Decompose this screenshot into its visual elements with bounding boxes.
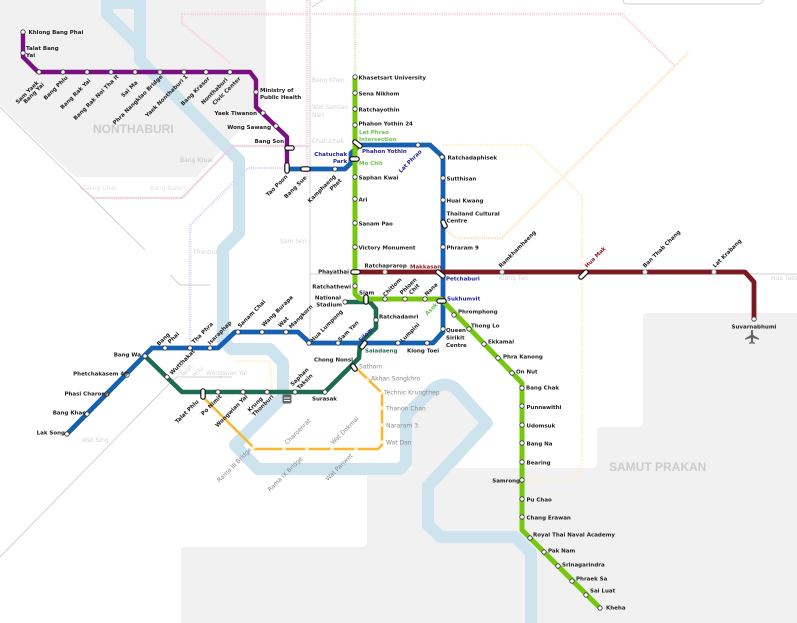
purple labels: Bang Rak Noi Tha It <box>73 74 121 122</box>
yellow line labels: Wat Pariwet <box>324 452 355 483</box>
region label: Samut Prakan: SAMUT PRAKAN <box>609 460 706 474</box>
blue labels: Ratchadaphisek <box>448 156 497 162</box>
blue labels: Sam Yan <box>337 320 360 343</box>
blue labels: Sukhumvit <box>447 296 481 302</box>
dark green labels: Taksin <box>296 373 314 391</box>
faint planned station labels: Taling Chan <box>82 185 118 192</box>
blue labels: Mangkorn <box>288 304 314 330</box>
yellow line labels: Technic Krungthep <box>383 390 440 396</box>
maroon labels: Ramkhamhaeng <box>498 230 538 269</box>
top right box edge <box>623 0 763 4</box>
light green labels: Asok <box>425 302 440 317</box>
light green labels: Thong Lo <box>471 324 500 330</box>
purple labels: Bang Sue <box>283 175 309 200</box>
dark green labels: Saladaeng <box>365 348 398 354</box>
river <box>107 0 531 623</box>
faint planned station labels: Bang Khen <box>312 77 345 84</box>
blue labels: Tha Phra <box>191 321 215 345</box>
blue labels: Centre <box>446 218 468 224</box>
dark green labels: Thonburi <box>252 394 275 418</box>
light green labels: Udomsuk <box>526 424 556 430</box>
dark green labels: Chong Nonsi <box>314 358 353 364</box>
light green labels: Ari <box>358 198 367 204</box>
faint planned station labels: Sam Sen <box>280 238 307 245</box>
dark green labels: Wutthakat <box>169 349 197 376</box>
light green labels: Ekkamai <box>488 340 514 346</box>
blue stations <box>65 143 445 436</box>
dark green labels: Talat Phlu <box>174 399 200 425</box>
light green labels: On Nut <box>516 370 538 376</box>
light green labels: Victory Monument <box>358 246 416 252</box>
dark green stations <box>165 300 378 394</box>
blue labels: Wat <box>278 316 291 329</box>
blue labels: Thailand Cultural <box>446 212 500 218</box>
dark green labels: Surasak <box>312 396 337 402</box>
faint planned station labels: Wat Samian <box>312 104 348 111</box>
faint planned station labels: Thonburi <box>192 249 220 256</box>
light green labels: Pu Chao <box>526 498 552 504</box>
light green labels: Chitlom <box>382 277 404 298</box>
blue labels: Silom <box>358 327 375 344</box>
light green labels: Phraek Sa <box>576 576 608 582</box>
maroon route <box>356 272 754 318</box>
light green labels: Samrong <box>492 478 520 484</box>
purple labels: Yaek Nonthaburi 1 <box>144 74 190 120</box>
faint planned station labels: Chatuchak <box>312 138 345 145</box>
dark green labels: Krung <box>247 396 264 414</box>
light green labels: Sai Luat <box>590 588 616 594</box>
faint planned station labels: Wat Sing <box>82 437 109 444</box>
faint planned station labels: Klong Tan <box>499 275 528 282</box>
faint planned station labels: Bang Bamru <box>150 185 187 192</box>
blue labels: Huai Kwang <box>446 198 484 204</box>
purple labels: Yai <box>25 53 35 59</box>
interchange capsules <box>203 142 586 397</box>
blue labels: Phahon Yothin <box>362 149 407 155</box>
light green labels: Khasetsart University <box>358 76 426 82</box>
light green labels: Ratchathewi <box>312 284 351 290</box>
yellow line stations <box>252 378 384 451</box>
purple labels: Bang Rak Yai <box>60 78 92 111</box>
maroon stations <box>383 270 756 321</box>
light green labels: Phayathai <box>318 270 349 276</box>
light green labels: Phra Kanong <box>503 354 543 360</box>
light green labels: Royal Thai Naval Academy <box>533 532 615 538</box>
yellow line <box>203 364 440 493</box>
yellow line labels: Charoenrat <box>284 417 313 446</box>
light green labels: Punnawithi <box>526 405 562 411</box>
light green labels: Pak Nam <box>548 548 575 554</box>
blue labels: Phraram 9 <box>446 246 479 252</box>
light green labels: Sanam Pao <box>358 222 393 228</box>
purple labels: Khlong Bang Phai <box>28 30 83 36</box>
blue labels <box>37 149 500 436</box>
blue labels: Phetchakasem 48 <box>73 372 128 378</box>
yellow line labels: Rama III Bridge <box>216 446 254 484</box>
purple labels: Ministry of <box>260 88 294 94</box>
faint planned station labels: Bang Kruai <box>180 157 213 164</box>
faint planned station labels: Phlu <box>191 365 206 379</box>
faint planned station labels: Talat <box>179 363 195 379</box>
light green route <box>355 77 600 608</box>
light green labels: Intersection <box>359 137 397 143</box>
yellow line labels: Nararam 3 <box>386 422 418 430</box>
light green labels: Phloen <box>399 277 418 296</box>
maroon labels: Lat Krabang <box>712 238 743 269</box>
blue labels: Park <box>333 159 347 165</box>
purple labels: Nonthaburi <box>200 77 229 106</box>
dark green labels: Saphan <box>290 367 310 388</box>
light green labels: Saphan Kwai <box>358 176 399 182</box>
blue labels: Lak Song <box>37 430 65 436</box>
dark green line <box>145 296 419 429</box>
dark green labels: National <box>315 296 341 302</box>
dark green labels: Ratchadamri <box>379 314 419 320</box>
purple labels: Civic Center <box>212 76 243 107</box>
blue labels: Lat Phrao <box>398 149 424 175</box>
blue labels: Queen <box>446 328 466 334</box>
purple labels: Bang Phlu <box>43 75 69 102</box>
blue labels: Petchaburi <box>446 276 480 282</box>
blue labels: Bang Wa <box>114 352 141 358</box>
yellow line labels <box>216 364 440 493</box>
blue labels: Phasi Charoen <box>64 392 109 398</box>
light green labels: Nana <box>424 282 440 298</box>
dark green labels: Po Nimit <box>200 394 224 417</box>
dark green labels <box>169 296 419 429</box>
purple labels: Wong Sawang <box>227 125 271 131</box>
blue labels: Chatuchak <box>314 152 347 158</box>
light green labels: Lat Phrao <box>359 130 389 136</box>
light green labels: Bang Chak <box>526 386 559 392</box>
maroon labels: Hua Mak <box>584 246 608 269</box>
purple stations <box>21 30 278 128</box>
blue labels: Isaraphap <box>207 320 233 346</box>
light green labels: Chit <box>408 283 422 296</box>
purple labels: Yaek Tiwanon <box>213 111 257 117</box>
light green labels <box>312 76 626 612</box>
purple labels: Bang Son <box>255 139 284 145</box>
maroon labels <box>364 229 777 330</box>
purple labels <box>15 30 309 200</box>
blue labels: Klong Toei <box>407 348 439 354</box>
purple labels: Tao Poon <box>265 174 289 198</box>
purple labels: Public Health <box>260 95 301 101</box>
yellow line labels: Wat Dokmai <box>330 415 361 446</box>
light green labels: Kheha <box>606 606 626 612</box>
purple route <box>23 32 287 168</box>
light green labels: Bearing <box>526 460 551 466</box>
purple labels: Phra Nangklao Bridge <box>112 74 165 126</box>
blue labels: Sutthisan <box>446 176 476 182</box>
dark green route <box>145 302 376 392</box>
faint planned station labels <box>82 77 797 444</box>
purple labels: Bang Krasor <box>180 76 212 107</box>
light green labels: Mo Chit <box>359 161 383 167</box>
maroon airport link <box>356 229 777 330</box>
light green stations <box>353 75 602 610</box>
blue labels: Bang <box>156 332 172 347</box>
blue route <box>68 145 443 433</box>
dark green labels: Stadium <box>316 302 342 308</box>
light green labels: Chang Erawan <box>526 516 571 522</box>
icon: airplane <box>745 330 759 344</box>
blue labels: Sanam Chai <box>237 299 267 329</box>
maroon labels: Ban Thab Chang <box>642 229 682 269</box>
icon: boat pier <box>282 394 292 404</box>
faint planned station labels: Nari <box>312 112 325 119</box>
blue labels: Lumpini <box>400 322 421 344</box>
blue labels: Phet <box>329 178 344 193</box>
blue labels: Kamphaeng <box>307 174 337 204</box>
blue labels: Wang Burapa <box>261 295 295 328</box>
blue line <box>37 143 500 437</box>
faint planned station labels: Wongwian Yai <box>206 370 247 377</box>
purple labels: Talat Bang <box>26 46 59 52</box>
maroon labels: Suvarnabhumi <box>732 324 777 330</box>
blue labels: Bang Khae <box>53 410 86 416</box>
light green labels: Phahon Yothin 24 <box>358 122 413 128</box>
light green labels: Sena Nikhom <box>358 92 400 98</box>
dark green labels: Wongwian Yai <box>215 394 249 429</box>
blue labels: Phai <box>167 332 181 345</box>
purple labels: Sam Yaek <box>15 80 41 106</box>
light green labels: Phromphong <box>458 310 498 316</box>
maroon labels: Ratchaprarop <box>364 264 407 270</box>
region label: Nonthaburi: NONTHABURI <box>93 122 174 136</box>
blue labels: Centre <box>446 343 467 349</box>
yellow line labels: Sathorn <box>359 364 383 370</box>
purple labels: Bang Yai <box>23 82 46 105</box>
light green labels: Srinagarindra <box>562 562 605 568</box>
maroon labels: Makkasan <box>410 264 441 270</box>
yellow line labels: Rama IX Bridge <box>267 455 305 493</box>
light green labels: Bang Na <box>526 442 553 448</box>
blue labels: Hua Lumpong <box>310 309 344 344</box>
light green labels: Siam <box>359 290 375 296</box>
yellow line labels: Akhan Songkhro <box>371 376 420 382</box>
blue labels: Sirikit <box>446 336 465 342</box>
light green labels: Ratchayothin <box>358 108 400 114</box>
yellow line route <box>203 367 382 449</box>
light green line <box>312 75 626 612</box>
yellow line labels: Wat Dan <box>386 440 412 446</box>
purple line <box>15 30 309 200</box>
yellow line labels: Thanon Chan <box>385 406 426 412</box>
purple labels: Sai Ma <box>121 80 140 99</box>
